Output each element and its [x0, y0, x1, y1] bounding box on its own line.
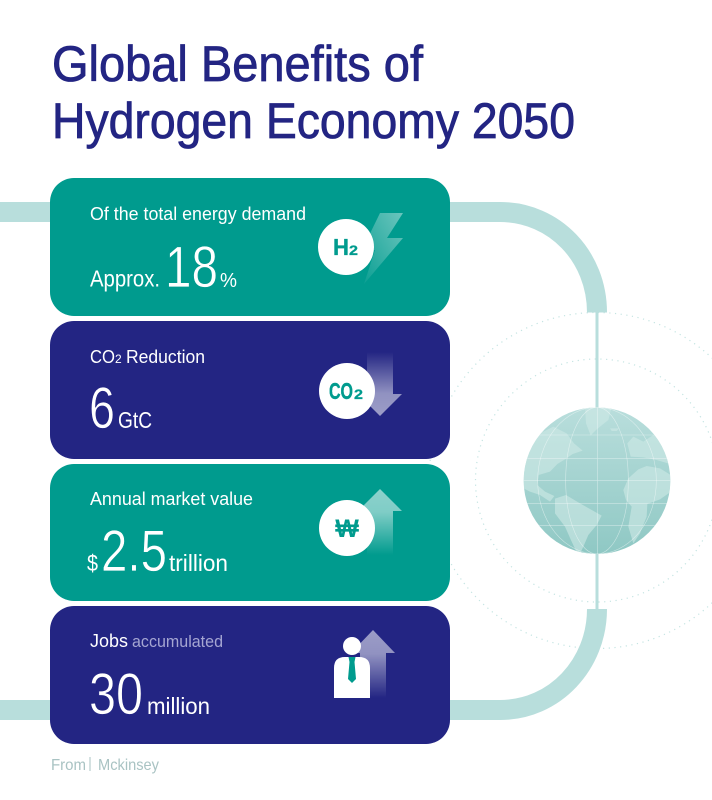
title: Hydrogen Economy 2050 [52, 92, 575, 149]
icon: CO2 badge: CO [329, 378, 353, 404]
market value: $ [87, 550, 98, 576]
connector pipe: top [0, 202, 598, 412]
icon: H2 badge [318, 219, 374, 275]
source note: Mckinsey [98, 757, 159, 774]
icon: won badge [319, 500, 375, 556]
icon: H2 badge: 2 [349, 242, 358, 258]
CO2 value: GtC [118, 407, 152, 433]
market value: 2.5 [101, 519, 167, 584]
panel: energy demand [50, 178, 450, 316]
source note [51, 757, 159, 774]
jobs heading [90, 630, 223, 651]
jobs value: million [147, 693, 210, 719]
source note: From [51, 757, 86, 774]
energy value: Approx. [90, 266, 160, 292]
CO2 value [89, 376, 152, 441]
panel: jobs [50, 606, 450, 744]
orbit rings [429, 312, 712, 648]
energy value [90, 235, 237, 300]
energy value: 18 [165, 235, 218, 300]
icon: CO2 badge: 2 [354, 386, 363, 402]
energy value: % [220, 270, 237, 292]
icon: won badge: ₩ [335, 515, 359, 543]
connector pipe: bottom [0, 550, 598, 720]
energy heading: Of the total energy demand [90, 203, 306, 224]
panel: market value [50, 464, 450, 601]
market value: trillion [169, 550, 228, 576]
CO2 heading: Reduction [126, 346, 205, 367]
icon: down arrow [358, 352, 402, 416]
market value [87, 519, 228, 584]
icon: lightning bolt [362, 213, 403, 284]
title [52, 35, 575, 149]
icon: person with tie [334, 637, 370, 698]
CO2 heading: CO [90, 346, 115, 367]
panel: CO2 reduction [50, 321, 450, 459]
CO2 heading [90, 346, 205, 367]
icon: up arrow [358, 489, 402, 555]
icon: H2 badge: H [333, 234, 349, 260]
CO2 heading: 2 [115, 352, 122, 366]
meridians and parallels [520, 407, 673, 557]
jobs heading: accumulated [132, 632, 223, 651]
jobs value [89, 662, 210, 727]
CO2 value: 6 [89, 376, 115, 441]
continents [520, 407, 673, 557]
icon: CO2 badge [319, 363, 375, 419]
jobs value: 30 [89, 662, 143, 727]
globe [520, 407, 673, 557]
market heading: Annual market value [90, 488, 253, 509]
jobs heading: Jobs [90, 630, 128, 651]
title: Global Benefits of [52, 35, 424, 92]
icon: up arrow [351, 630, 395, 698]
